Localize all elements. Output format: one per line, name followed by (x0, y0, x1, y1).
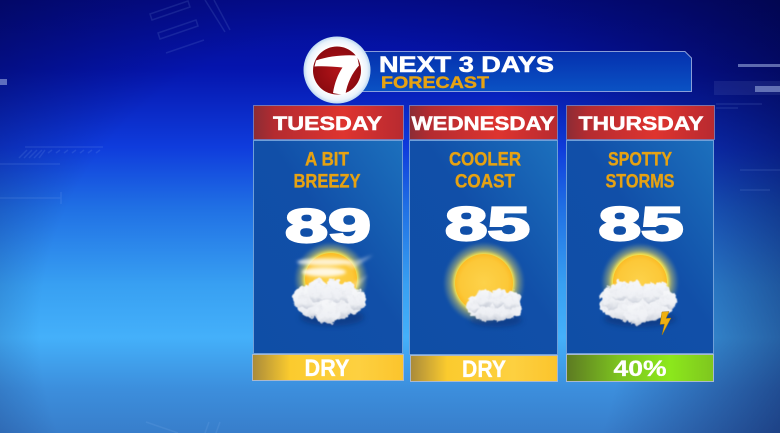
Tuesday precipitation bar (252, 354, 404, 382)
Tuesday temperature: 89 (285, 199, 371, 252)
Tuesday header (254, 106, 404, 140)
title text: NEXT 3 DAYS (379, 52, 554, 77)
icon: sun with storm cloud (600, 243, 679, 335)
Wednesday precipitation bar (410, 356, 558, 383)
icon: sun with small cloud (443, 242, 525, 327)
panel: Tuesday (252, 106, 404, 382)
Wednesday temperature: 85 (445, 197, 530, 250)
Tuesday precipitation bar: DRY (304, 355, 350, 382)
panel: Wednesday (410, 106, 558, 383)
Thursday condition: STORMS (606, 170, 674, 192)
panel: Thursday (566, 106, 714, 382)
icon: lightning bolt (660, 312, 671, 335)
subtitle text: FORECAST (381, 74, 489, 92)
Thursday temperature: 85 (598, 197, 684, 250)
Tuesday condition: A BIT (305, 148, 349, 170)
Tuesday condition: BREEZY (294, 170, 360, 192)
icon: breezy sun with cloud (293, 242, 373, 326)
Wednesday condition: COOLER (449, 148, 521, 170)
Tuesday body (254, 140, 402, 354)
Wednesday header: WEDNESDAY (412, 114, 555, 135)
Wednesday precipitation bar: DRY (462, 356, 506, 383)
Thursday precipitation bar (566, 354, 714, 382)
Thursday condition (606, 148, 674, 192)
Thursday precipitation bar: 40% (614, 356, 666, 381)
Wednesday body (410, 140, 558, 354)
Thursday body (566, 140, 714, 354)
logo: channel 7 (304, 36, 370, 104)
Thursday header: THURSDAY (578, 114, 704, 135)
title banner (362, 52, 692, 92)
Tuesday condition (294, 148, 360, 192)
banner shape (362, 52, 692, 92)
Wednesday condition (449, 148, 521, 192)
Thursday condition: SPOTTY (608, 148, 672, 170)
Thursday header (566, 106, 714, 140)
Wednesday condition: COAST (455, 170, 515, 192)
Tuesday header: TUESDAY (273, 114, 382, 135)
Wednesday header (410, 106, 558, 140)
